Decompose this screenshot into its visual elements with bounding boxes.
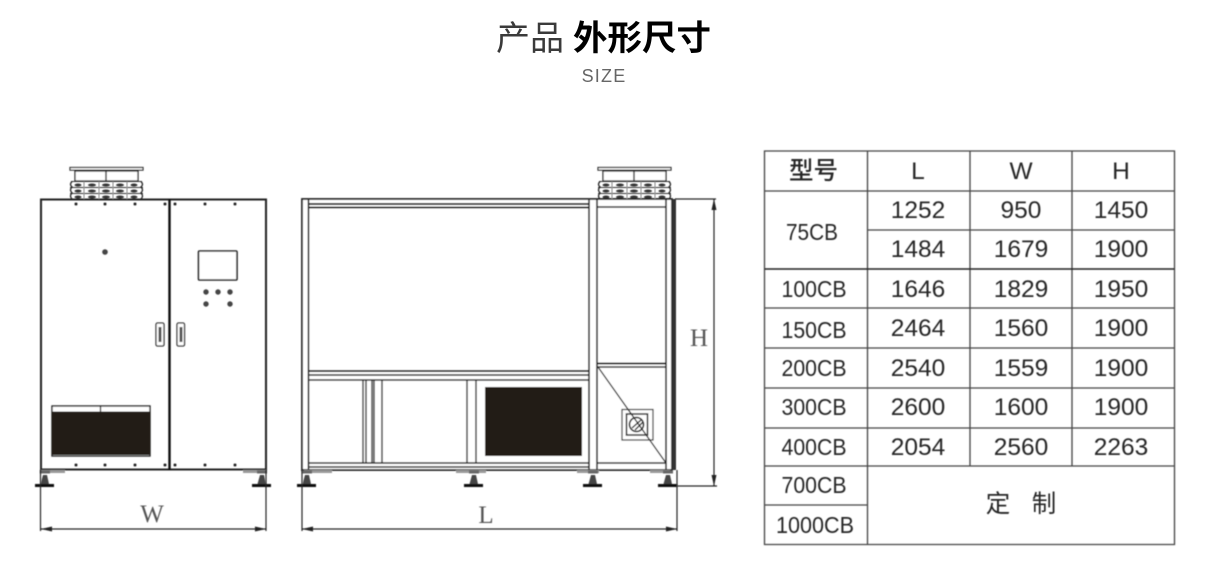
row: 200CB: 2540 [891,355,945,382]
label H: H [690,325,708,352]
table header row: 型号 [789,157,838,185]
row: 400CB: 400CB [782,434,846,460]
table header row: W [1009,158,1033,185]
row: 100CB: 1829 [994,276,1048,303]
label L: L [478,502,494,529]
row: 400CB: 2560 [994,434,1048,461]
row: 100CB [782,276,1148,303]
row: 100CB: 1950 [1094,276,1148,303]
custom-made note: 制 [1032,490,1056,518]
row: 400CB [782,434,1148,461]
row: 300CB: 1600 [994,394,1048,421]
front base and feet [35,470,271,486]
row: 150CB: 150CB [782,317,846,343]
control buttons [203,289,233,307]
row: 300CB [782,394,1148,421]
front air grille [52,406,150,456]
icon: side roof vent [598,168,671,199]
icon: front roof vent [70,168,143,199]
size table [764,151,1174,544]
row: 400CB: 2054 [891,434,945,461]
front view drawing [35,168,271,486]
icon: fan box [622,410,653,440]
row: 150CB: 1900 [1094,315,1148,342]
row: 200CB: 1900 [1094,355,1148,382]
diagonal brace [598,367,666,463]
indicator light [102,249,108,255]
row: 200CB [782,355,1148,382]
door bolts [74,202,236,466]
dimension H [675,199,717,486]
row: 75CB: 1679 [994,236,1048,263]
left door handle [156,323,164,346]
table header row: H [1112,158,1130,185]
row: 75CB: 75CB [786,219,838,245]
row: 1000CB: 1000CB [776,512,854,538]
row: 75CB: 1484 [891,236,945,263]
right door handle [177,323,184,346]
row: 75CB: 1252 [891,197,945,224]
side base and feet [297,470,677,486]
row: 75CB: 1450 [1094,197,1148,224]
table header row [789,157,1130,185]
frame rails [308,199,674,470]
side view drawing [297,168,677,486]
row: 400CB: 2263 [1094,434,1148,461]
row: 100CB: 100CB [782,276,846,302]
side air grille [485,387,582,456]
door divider [168,199,171,470]
row: 75CB [786,197,1148,263]
row: 75CB: 950 [1001,197,1041,224]
row: 300CB: 2600 [891,394,945,421]
table header row: L [911,158,925,185]
subtitle: SIZE: SIZE [582,66,626,86]
row: 150CB: 2464 [891,315,945,342]
row: 100CB: 1646 [891,276,945,303]
label W: W [140,501,164,528]
row: 150CB [782,315,1148,343]
row: 200CB: 200CB [782,355,846,381]
row: 300CB: 1900 [1094,394,1148,421]
custom-made note: 定 [986,490,1010,518]
row: 200CB: 1559 [994,355,1048,382]
dimension L [302,470,677,532]
title [496,20,711,58]
title: 产品 [496,20,564,58]
row: 75CB: 1900 [1094,236,1148,263]
row: 150CB: 1560 [994,315,1048,342]
custom-made note [986,490,1056,518]
row: 300CB: 300CB [782,394,846,420]
dimension W [40,470,266,532]
title: 外形尺寸 [573,20,711,58]
touch screen [198,251,237,280]
row: 700CB: 700CB [782,472,846,498]
